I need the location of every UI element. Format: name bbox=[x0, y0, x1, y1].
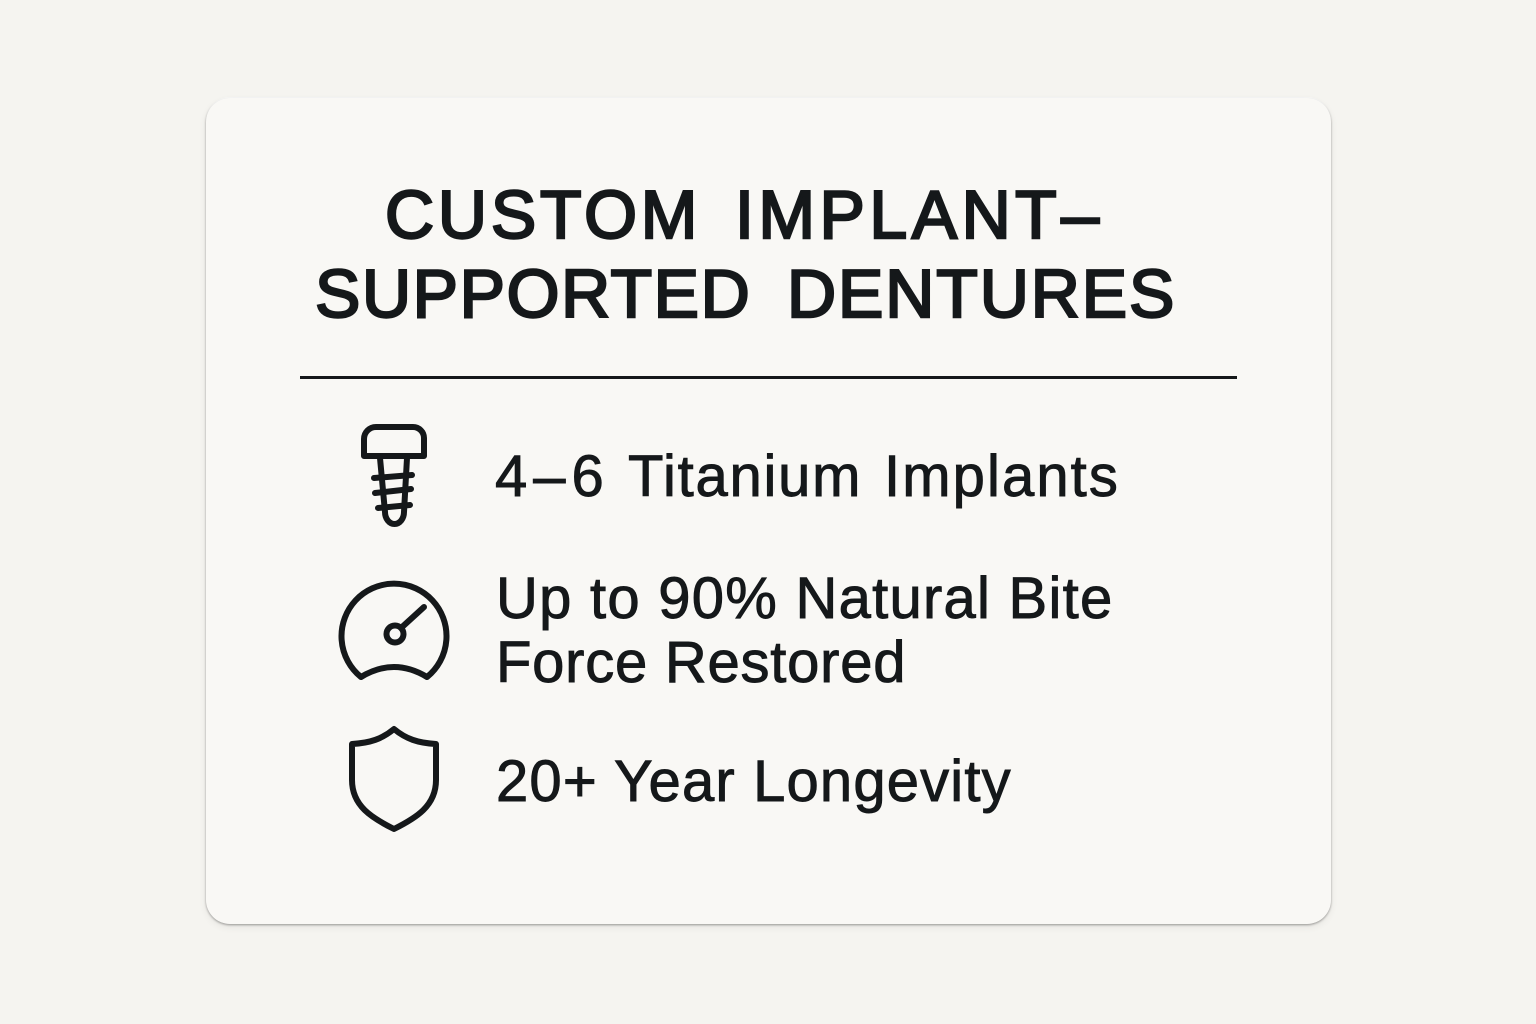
title: CUSTOM bbox=[385, 177, 701, 253]
title: IMPLANT– bbox=[735, 177, 1104, 253]
text: bite force: Up to 90% Natural Bite bbox=[496, 566, 1113, 631]
text: bite force: Force Restored bbox=[496, 630, 906, 695]
panel: main card bbox=[206, 98, 1331, 924]
icon: gauge bbox=[338, 580, 450, 680]
text: implants: Titanium bbox=[628, 444, 862, 509]
text: implants: Implants bbox=[884, 444, 1120, 509]
icon: implant screw bbox=[361, 424, 427, 527]
title bbox=[315, 177, 1176, 332]
text: implants bbox=[495, 444, 1120, 509]
title: DENTURES bbox=[787, 256, 1176, 332]
icon: shield bbox=[349, 726, 439, 832]
text: longevity: 20+ Year Longevity bbox=[496, 749, 1012, 814]
title: SUPPORTED bbox=[315, 256, 751, 332]
text: bite force bbox=[496, 566, 1113, 695]
text: implants: 4–6 bbox=[495, 444, 610, 509]
